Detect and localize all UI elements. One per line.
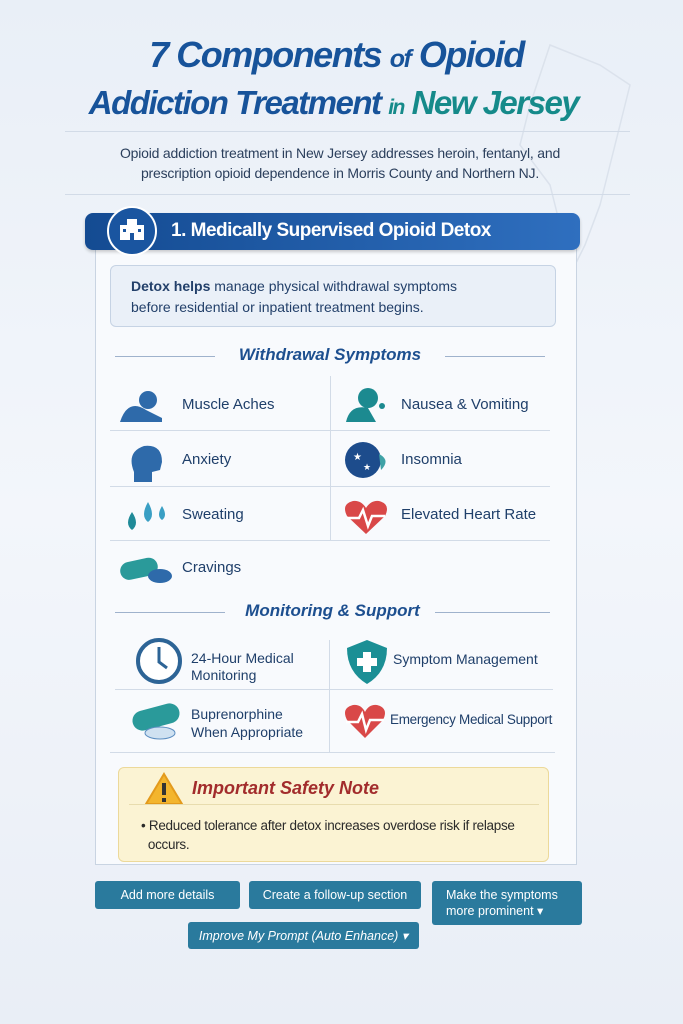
buttons: Make the symptoms	[446, 888, 558, 902]
safety note callout: Important Safety Note	[192, 778, 379, 798]
icon: capsule	[132, 703, 180, 740]
icon: muscle aches	[120, 391, 162, 422]
safety note callout: occurs.	[148, 837, 189, 852]
monitoring grid: 24-Hour Medical	[191, 650, 294, 666]
monitoring grid: Emergency Medical Support	[390, 712, 552, 727]
monitoring grid: Symptom Management	[393, 651, 538, 667]
icon: nausea	[346, 388, 385, 422]
icon: insomnia: ★	[353, 452, 362, 463]
icon: sweating	[128, 502, 165, 530]
symptoms grid: Sweating	[182, 506, 244, 523]
title: Addiction Treatment in New Jersey	[89, 84, 578, 121]
title: 7 Components of Opioid	[149, 34, 524, 75]
safety note callout: • Reduced tolerance after detox increases overdose risk if relapse	[141, 818, 515, 833]
icon: anxiety	[132, 446, 162, 482]
monitoring grid: Buprenorphine	[191, 706, 283, 722]
detox info box: before residential or inpatient treatment begins.	[131, 299, 424, 315]
icon: shield	[347, 640, 387, 684]
monitoring grid: Monitoring	[191, 667, 256, 683]
buttons: Improve My Prompt (Auto Enhance) ▾	[199, 928, 408, 942]
heading: withdrawal symptoms: Withdrawal Symptoms	[239, 345, 421, 364]
symptoms grid	[110, 376, 550, 583]
subtitle: prescription opioid dependence in Morris County and Northern NJ.	[141, 165, 539, 181]
subtitle	[120, 145, 560, 181]
icon: warning	[144, 772, 184, 804]
symptoms grid: Cravings	[182, 559, 241, 576]
icon: insomnia	[345, 442, 386, 478]
section header bar	[85, 213, 580, 250]
detox info box: Detox helps manage physical withdrawal symptoms	[131, 278, 457, 294]
icon: insomnia: ★	[363, 462, 371, 472]
buttons: Create a follow-up section	[263, 888, 407, 902]
subtitle: Opioid addiction treatment in New Jersey addresses heroin, fentanyl, and	[120, 145, 560, 161]
symptoms grid: Anxiety	[182, 451, 231, 468]
monitoring grid	[110, 638, 555, 753]
safety note callout	[118, 767, 549, 862]
icon: heart	[345, 500, 387, 534]
icon: hospital	[107, 206, 157, 256]
section header bar: 1. Medically Supervised Opioid Detox	[171, 220, 491, 241]
buttons: Add more details	[121, 888, 214, 902]
decorative NJ map outline	[520, 44, 631, 262]
buttons: more prominent ▾	[446, 904, 543, 918]
symptoms grid: Nausea & Vomiting	[401, 396, 529, 413]
heading: monitoring & support: Monitoring & Support	[245, 601, 420, 620]
symptoms grid: Insomnia	[401, 451, 462, 468]
icon: heart monitor	[345, 704, 385, 738]
icon: clock	[136, 638, 182, 684]
symptoms grid: Elevated Heart Rate	[401, 506, 536, 523]
title	[88, 34, 581, 121]
symptoms grid: Muscle Aches	[182, 396, 275, 413]
main panel	[95, 240, 577, 865]
detox info box	[110, 265, 556, 327]
icon: pills	[120, 558, 172, 583]
monitoring grid: When Appropriate	[191, 724, 303, 740]
buttons	[95, 881, 582, 949]
